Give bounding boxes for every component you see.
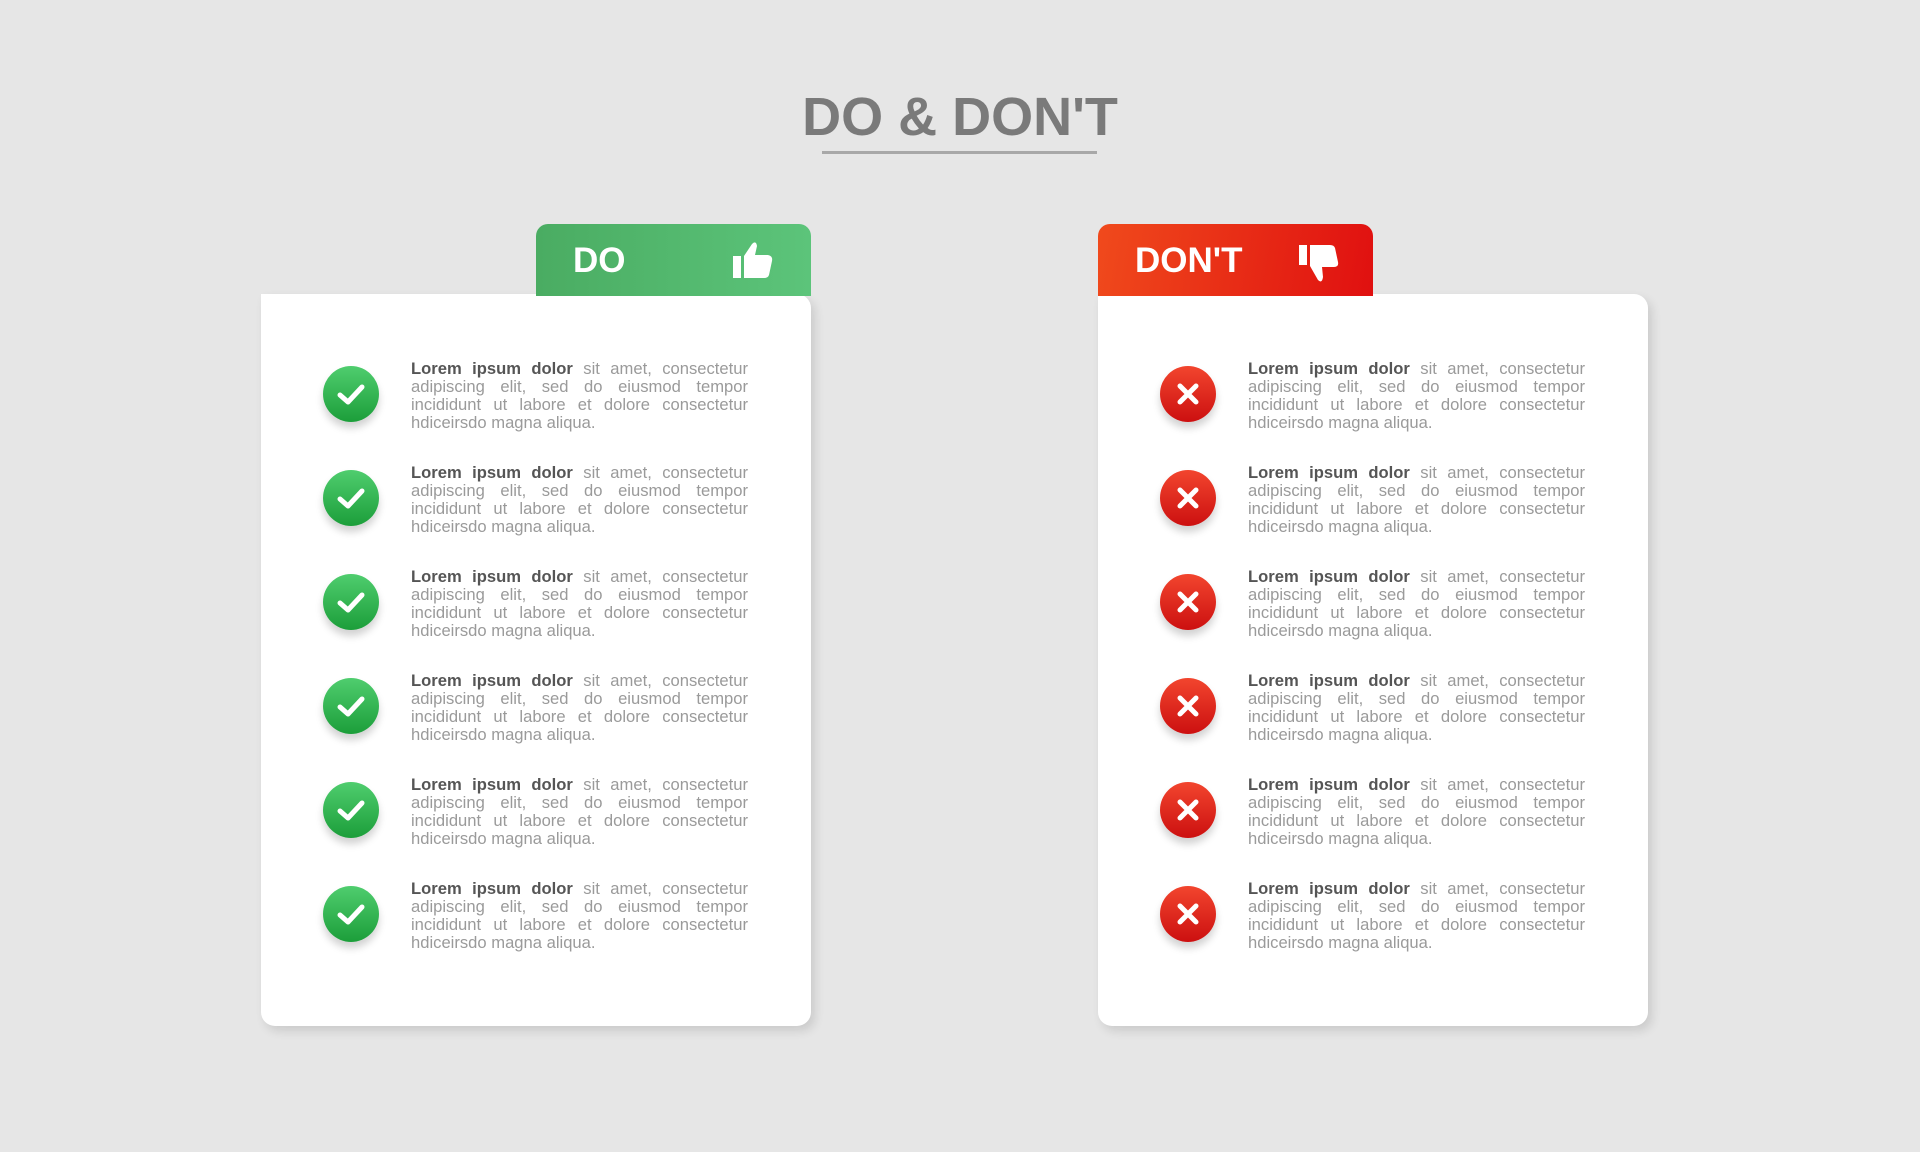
item do 2 bbox=[320, 463, 748, 536]
item dont 1: incididunt ut labore et dolore consectetur bbox=[1248, 395, 1585, 414]
item dont 5: incididunt ut labore et dolore consectetur bbox=[1248, 811, 1585, 830]
icon: thumbs up bbox=[733, 242, 772, 278]
item dont 5 bbox=[1157, 775, 1585, 848]
item dont 5: adipiscing elit, sed do eiusmod tempor bbox=[1248, 793, 1585, 812]
item do 6: adipiscing elit, sed do eiusmod tempor bbox=[411, 897, 748, 916]
item do 1: incididunt ut labore et dolore consectetur bbox=[411, 395, 748, 414]
item do 5: adipiscing elit, sed do eiusmod tempor bbox=[411, 793, 748, 812]
item do 2: adipiscing elit, sed do eiusmod tempor bbox=[411, 481, 748, 500]
item dont 1: hdiceirsdo magna aliqua. bbox=[1248, 413, 1432, 432]
item do 3: hdiceirsdo magna aliqua. bbox=[411, 621, 596, 640]
item do 4 bbox=[320, 671, 748, 744]
item dont 6: adipiscing elit, sed do eiusmod tempor bbox=[1248, 897, 1585, 916]
item dont 4: Lorem ipsum dolor sit amet, consectetur bbox=[1248, 671, 1585, 690]
item do 2: hdiceirsdo magna aliqua. bbox=[411, 517, 596, 536]
item dont 5: hdiceirsdo magna aliqua. bbox=[1248, 829, 1432, 848]
item do 2: incididunt ut labore et dolore consectetur bbox=[411, 499, 748, 518]
item dont 3: Lorem ipsum dolor sit amet, consectetur bbox=[1248, 567, 1585, 586]
item dont 2: adipiscing elit, sed do eiusmod tempor bbox=[1248, 481, 1585, 500]
item do 4: Lorem ipsum dolor sit amet, consectetur bbox=[411, 671, 748, 690]
tab: do bbox=[536, 224, 811, 296]
item do 1: hdiceirsdo magna aliqua. bbox=[411, 413, 596, 432]
item do 5: hdiceirsdo magna aliqua. bbox=[411, 829, 596, 848]
item dont 4 bbox=[1157, 671, 1585, 744]
item do 1: Lorem ipsum dolor sit amet, consectetur bbox=[411, 359, 748, 378]
item dont 3: hdiceirsdo magna aliqua. bbox=[1248, 621, 1432, 640]
item dont 2: Lorem ipsum dolor sit amet, consectetur bbox=[1248, 463, 1585, 482]
item dont 5: Lorem ipsum dolor sit amet, consectetur bbox=[1248, 775, 1585, 794]
title: DO & DON'T bbox=[802, 87, 1118, 147]
item dont 6: hdiceirsdo magna aliqua. bbox=[1248, 933, 1432, 952]
icon: thumbs down bbox=[1299, 245, 1338, 282]
item dont 3: adipiscing elit, sed do eiusmod tempor bbox=[1248, 585, 1585, 604]
item dont 6: incididunt ut labore et dolore consectetur bbox=[1248, 915, 1585, 934]
panel: dont bbox=[1098, 294, 1648, 1026]
item dont 2: incididunt ut labore et dolore consectetur bbox=[1248, 499, 1585, 518]
item do 6: Lorem ipsum dolor sit amet, consectetur bbox=[411, 879, 748, 898]
item do 6: hdiceirsdo magna aliqua. bbox=[411, 933, 596, 952]
item do 5 bbox=[320, 775, 748, 848]
item dont 4: adipiscing elit, sed do eiusmod tempor bbox=[1248, 689, 1585, 708]
item do 6 bbox=[320, 879, 748, 952]
item dont 1: Lorem ipsum dolor sit amet, consectetur bbox=[1248, 359, 1585, 378]
item dont 4: incididunt ut labore et dolore consectetur bbox=[1248, 707, 1585, 726]
item dont 4: hdiceirsdo magna aliqua. bbox=[1248, 725, 1432, 744]
item do 3: incididunt ut labore et dolore consectetur bbox=[411, 603, 748, 622]
item do 5: Lorem ipsum dolor sit amet, consectetur bbox=[411, 775, 748, 794]
item do 3: Lorem ipsum dolor sit amet, consectetur bbox=[411, 567, 748, 586]
item dont 2: hdiceirsdo magna aliqua. bbox=[1248, 517, 1432, 536]
item do 2: Lorem ipsum dolor sit amet, consectetur bbox=[411, 463, 748, 482]
item do 4: adipiscing elit, sed do eiusmod tempor bbox=[411, 689, 748, 708]
item dont 6: Lorem ipsum dolor sit amet, consectetur bbox=[1248, 879, 1585, 898]
item dont 1: adipiscing elit, sed do eiusmod tempor bbox=[1248, 377, 1585, 396]
item do 4: incididunt ut labore et dolore consectetur bbox=[411, 707, 748, 726]
item dont 3: incididunt ut labore et dolore consectetur bbox=[1248, 603, 1585, 622]
tab label: do: DO bbox=[573, 241, 626, 280]
item do 1: adipiscing elit, sed do eiusmod tempor bbox=[411, 377, 748, 396]
tab label: dont: DON'T bbox=[1135, 241, 1242, 280]
item do 3 bbox=[320, 567, 748, 640]
item do 3: adipiscing elit, sed do eiusmod tempor bbox=[411, 585, 748, 604]
item do 5: incididunt ut labore et dolore consectetur bbox=[411, 811, 748, 830]
tab: dont bbox=[1098, 224, 1373, 296]
item do 1 bbox=[320, 359, 748, 432]
item do 4: hdiceirsdo magna aliqua. bbox=[411, 725, 596, 744]
item dont 3 bbox=[1157, 567, 1585, 640]
item dont 6 bbox=[1157, 879, 1585, 952]
item do 6: incididunt ut labore et dolore consectetur bbox=[411, 915, 748, 934]
item dont 2 bbox=[1157, 463, 1585, 536]
panel: do bbox=[261, 294, 811, 1026]
item dont 1 bbox=[1157, 359, 1585, 432]
